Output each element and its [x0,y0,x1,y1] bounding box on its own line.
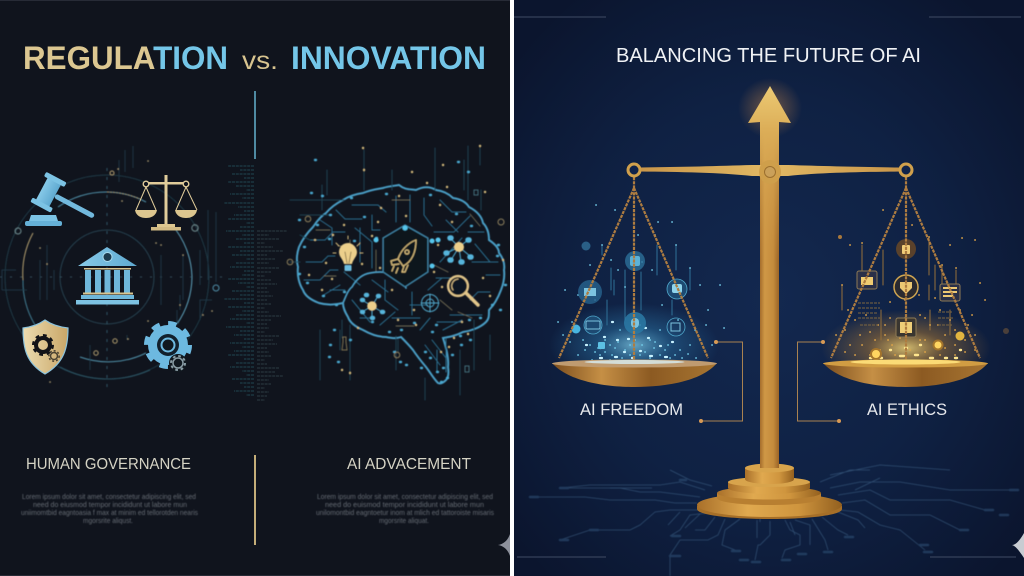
blue nodes [299,160,506,382]
icon: gavel [25,172,102,231]
title: regulation vs innovation [23,40,486,76]
text block: advancement description: unilomontbid eagntoetur inom at mlich ed tattoroiste misaris [316,508,494,517]
left scale pan [552,360,717,387]
text block: governance description [21,492,198,525]
text block: advancement description: need do euismod tempor incididunt ut labore mun [325,500,484,509]
icon: balance scale [135,175,197,230]
particles: ai freedom [558,205,724,360]
icon: rocket [391,240,416,273]
right scale pan glow [821,310,991,386]
text block: governance description: mgorsrite aliqust. [83,516,133,525]
text block: governance description: need do eiusmod tempor incididunt ut labore mun [33,500,187,509]
hub glows [376,228,438,266]
text block: governance description: uniimomtbid eagntoasia f max at minim ed tellorotden nearis [21,508,198,517]
particles: ai ethics [836,210,985,358]
icon: shield with gears [23,320,68,374]
title: regulation vs innovation: vs. [242,47,278,75]
connector: ai freedom [699,340,742,423]
icon: network node [446,238,471,262]
label: ai advacement: AI ADVACEMENT [347,456,472,473]
text block: governance description: Lorem ipsum dolor sit amet, consectetur adipiscing elit, sed [22,492,196,501]
label: human governance: HUMAN GOVERNANCE [26,456,191,473]
title: regulation vs innovation: REGULATION [23,40,228,76]
scale base [697,450,842,519]
panel: balancing the future of ai [514,0,1024,576]
left scale chains [559,177,708,360]
illustration: circuit brain [287,146,506,400]
icon: gear [146,324,190,372]
gold nodes [309,146,503,373]
icon: light bulb [333,236,363,271]
left scale pan glow [549,303,719,387]
scale column [760,122,779,467]
icon: magnifier [448,276,478,305]
title: regulation vs innovation: INNOVATION [291,40,486,76]
icon: network node lower [362,295,383,318]
left beam ring [628,164,640,176]
label: ai freedom: AI FREEDOM [580,401,683,419]
circuit board base pattern [530,465,1018,576]
arrow glow [738,78,802,138]
right scale pan [823,360,988,387]
governance circle diagram [0,146,225,392]
outer signal lines [290,146,490,400]
decorative corner star [498,534,510,556]
up arrow with shaft highlight [748,86,791,260]
right beam ring [900,164,912,176]
icon: globe [421,294,439,312]
icons: ai freedom bubbles [572,242,687,349]
decorative corner star [1012,533,1024,558]
scale beam [640,165,900,176]
central hexagon [383,225,428,287]
pivot [759,160,781,184]
brain outline [297,185,504,383]
icon: institution building [76,247,139,304]
text block: advancement description: Lorem ipsum dolor sit amet, consectetur adipiscing elit, sed [317,492,493,501]
text block: advancement description: mgorsrite aliquat. [379,516,429,525]
label: ai ethics: AI ETHICS [867,401,947,419]
connector: ai ethics [798,340,841,423]
text block: advancement description [316,492,494,525]
inner lobe [343,272,406,303]
circuit traces [304,195,500,372]
icons: ai ethics emblems [838,235,1009,359]
center divider with data column [224,91,287,545]
panel: regulation vs innovation [0,0,510,576]
right scale chains [831,177,980,360]
title: balancing the future of ai: BALANCING THE FUTURE OF AI [616,45,921,67]
